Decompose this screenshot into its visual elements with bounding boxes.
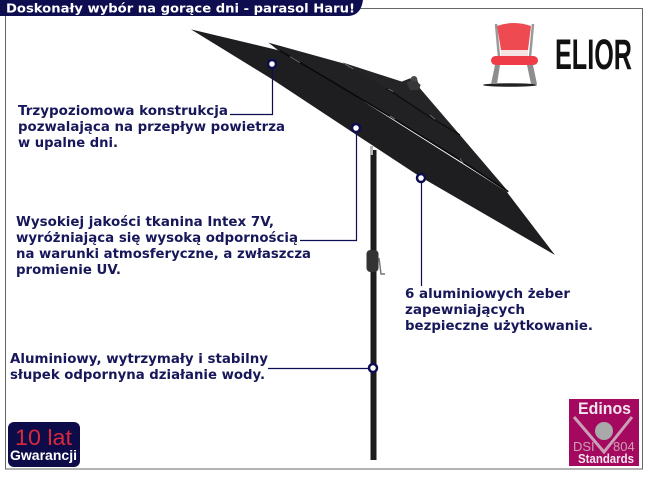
icon: red chair [483, 23, 538, 87]
callout text: zapewniających [405, 303, 525, 318]
leader line [230, 64, 272, 114]
umbrella pole [366, 146, 385, 460]
callout: Intex 7V fabric [16, 124, 360, 278]
badge: Edinos DSI 804 Standards [569, 399, 639, 466]
callout text: promienie UV. [16, 263, 121, 278]
badge: 10 years warranty: 10 lat [15, 425, 72, 450]
badge: Edinos DSI 804 Standards: 804 [613, 439, 635, 454]
logo: Elior chair and wordmark [483, 23, 632, 87]
badge: Edinos DSI 804 Standards: DSI [573, 439, 595, 454]
leader line [300, 128, 356, 240]
callout: three tier construction [18, 60, 285, 151]
leader line [420, 178, 422, 286]
callout: aluminium ribs [405, 174, 593, 334]
badge: 10 years warranty: Gwarancji [10, 447, 77, 463]
callout text: Wysokiej jakości tkanina Intex 7V, [16, 215, 274, 230]
callout text: Aluminiowy, wytrzymały i stabilny [10, 352, 269, 367]
callout text: Trzypoziomowa konstrukcja [18, 104, 228, 119]
callout text: 6 aluminiowych żeber [405, 287, 571, 302]
callout text: pozwalająca na przepływ powietrza [18, 120, 285, 135]
title banner: Doskonały wybór na gorące dni - parasol Haru! [6, 0, 355, 16]
callout text: słupek odpornyna działanie wody. [10, 368, 265, 383]
leader line [268, 368, 373, 370]
marker dot [417, 174, 425, 182]
callout text: w upalne dni. [18, 136, 118, 151]
callout text: na warunki atmosferyczne, a zwłaszcza [16, 247, 311, 262]
badge: Edinos DSI 804 Standards: Edinos [578, 399, 631, 418]
marker dot [369, 364, 377, 372]
badge: Edinos DSI 804 Standards: Standards [578, 451, 634, 466]
umbrella canopy [191, 29, 555, 255]
marker dot [352, 124, 360, 132]
badge: 10 years warranty [8, 422, 80, 467]
callout text: wyróżniająca się wysoką odpornością [16, 231, 298, 246]
umbrella [191, 29, 555, 460]
callout: aluminium pole [10, 352, 377, 383]
marker dot [268, 60, 276, 68]
callout text: bezpieczne użytkowanie. [405, 319, 593, 334]
